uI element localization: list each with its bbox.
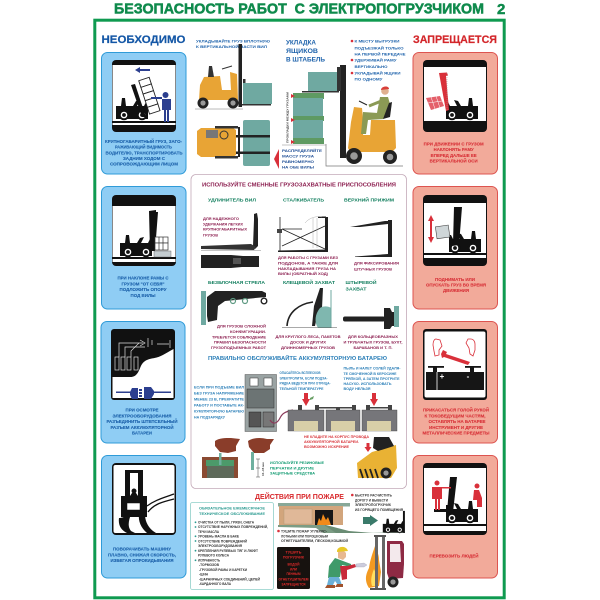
text [108, 546, 176, 563]
fire: warning box: ПЕННЫМ [286, 572, 301, 576]
attachment: pusher: СТАЛКИВАТЕЛЬ [283, 198, 324, 202]
heading: required: НЕОБХОДИМО [102, 34, 186, 46]
panel: monthly maintenance: ТЕЧИ МАСЛА [198, 530, 220, 534]
battery: cleaning note: НАСУХО. ИСПОЛЬЗОВАТЬ [344, 382, 392, 386]
heading: battery: ПРАВИЛЬНО ОБСЛУЖИВАЙТЕ АККУМУЛЯТОРНУЮ БАТАРЕЮ [208, 354, 387, 362]
panel: monthly maintenance: -ГРУЗОВОЙ РАМЫ И КАРЕТКИ [199, 568, 248, 572]
attachment: pusher: НАКЛАДЫВАНИЯ ГРУЗА НА [278, 266, 336, 271]
list: stacking rules: ПОДЪЕЗЖАЙ ТОЛЬКО [354, 45, 404, 50]
fire: burning building [278, 503, 405, 533]
attachment: pincer grip: ДОСОК И ДРУГИХ [290, 340, 326, 344]
panel: prohibited 1 [413, 52, 498, 174]
text: ГРУЗОМ "ОТ СЕБЯ" [122, 282, 164, 286]
battery: wire warning: НЕ КЛАДИТЕ НА КОРПУС ПРОВОДА [304, 435, 369, 439]
text: ОПУСКАТЬ ГРУЗ ВО ВРЕМЯ [426, 282, 486, 288]
attachment: top clamp: ДЛЯ ФИКСИРОВАНИЯ [354, 260, 399, 266]
battery: cleaning note: ТЕ СМОЧЕННОЙ В КЕРОСИНЕ [344, 372, 397, 376]
battery: low voltage note: КУМУЛЯТОРНУЮ БАТАРЕЮ [194, 410, 244, 414]
panel: prohibited 3: - [467, 372, 470, 381]
text: ИНСТРУМЕНТ И ДРУГИЕ [429, 425, 483, 430]
text: МАССУ ГРУЗА [282, 154, 314, 158]
text: ВОДИТЕЛЮ, ТРАНСПОРТИРОВАТЬ [106, 150, 182, 155]
panel: monthly maintenance: ОБЯЗАТЕЛЬНОЕ ЕЖЕМЕСЯЧНОЕ [199, 506, 265, 510]
attachment: pincer grip: ДЛЯ КРУГЛОГО ЛЕСА, ПАКЕТОВ [276, 334, 341, 339]
text: ВПЕРЕД ДАЛЬШЕ ЕЕ [431, 153, 477, 158]
panel: required 3 [101, 322, 185, 443]
attachment: top clamp: ШТУЧНЫХ ГРУЗОВ [354, 266, 392, 271]
attachment: pin grip: И ТРУБЧАТЫХ ГРУЗОВ, БУХТ, [344, 340, 402, 344]
text: РАЖИВАЮЩИЙ ВИДИМОСТЬ [115, 145, 172, 150]
panel: prohibited 3 [413, 322, 498, 443]
text [424, 142, 484, 164]
text [282, 149, 323, 169]
attachment: boom: БЕЗБЛОЧНАЯ СТРЕЛА [208, 280, 266, 285]
panel: required 2 [102, 186, 186, 309]
panel: monthly maintenance: ОТСУТСТВИЕ НАРУЖНЫХ ПОВРЕЖДЕНИЙ, [198, 525, 268, 529]
text [426, 277, 486, 293]
text: ЗАДНИМ ХОДОМ С [123, 156, 165, 161]
panel: monthly maintenance: -ШАРНИРНЫХ СОЕДИНЕНИЙ, ЦЕПЕЙ [199, 577, 261, 581]
panel: monthly maintenance: ОЧИСТКА ОТ ПЫЛИ, ГРЯЗИ, СНЕГА [198, 520, 255, 524]
text [106, 408, 178, 436]
heading: stacking: УКЛАДКА [286, 40, 317, 46]
attachment: pin grip: ШТЫРЕВОЙ [346, 280, 376, 285]
attachment: pusher: ДЛЯ РАБОТЫ С ГРУЗАМИ БЕЗ [278, 255, 339, 260]
battery: hand with hydrometer: 10–15 мм [261, 462, 265, 476]
list: stacking rules: УКЛАДЫВАЙ ЯЩИКИ [354, 70, 401, 76]
attachment: pincer grip: КЛЕЩЕВОЙ ЗАХВАТ [283, 280, 335, 285]
fire: extinguish note: ТУШИТЕ ПОЖАР УГЛЕКИС- [281, 530, 327, 534]
text: РАЗЪЕМ АККУМУЛЯТОРНОЙ [110, 425, 174, 430]
attachment: pincer grip [276, 280, 341, 350]
panel: monthly maintenance [190, 502, 274, 590]
battery: gloves note: ПЕРЧАТКИ И ДРУГИЕ [270, 466, 315, 470]
text: ОСТАВЛЯТЬ НА БАТАРЕЕ [428, 419, 486, 424]
list: stacking rules: УДЕРЖИВАЙ РАМУ [354, 58, 397, 63]
attachment: boom: ГРУЗОПОДЪЕМНЫХ РАБОТ [211, 345, 267, 350]
battery: cleaning note: ТРЯПКОЙ, А ЗАТЕМ ПРОТРИТЕ [344, 377, 400, 381]
panel: monthly maintenance: РУЛЕВОГО КОЛЕСА [198, 554, 230, 558]
text: СОПРОВОЖДАЮЩИМ ЛИЦОМ [110, 162, 179, 167]
fire: extinguish note [277, 530, 349, 543]
attachment: boom: ТРЕБУЕТСЯ СОБЛЮДЕНИЕ [212, 334, 266, 340]
panel: prohibited 4 [413, 456, 498, 578]
fire: warning box: ОГНЕТУШИТЕЛЕМ [278, 578, 309, 582]
text: ПОДНИМАТЬ ИЛИ [435, 277, 475, 282]
text: МЕТАЛЛИЧЕСКИЕ ПРЕДМЕТЫ [422, 430, 490, 436]
text: К ТОКОВЕДУЩИМ ЧАСТЯМ, [424, 414, 486, 418]
fire: clear road note: ИЗ ГОРЯЩЕГО ПОМЕЩЕНИЯ [355, 508, 404, 512]
battery: gloves note: ЗАЩИТНЫЕ СРЕДСТВА [270, 472, 315, 476]
fire: warning box: ЗАПРЕЩАЕТСЯ [282, 582, 306, 586]
fire: warning box: ВОДОЙ [288, 562, 300, 566]
title: БЕЗОПАСНОСТЬ РАБОТ С ЭЛЕКТРОПОГРУЗЧИКОМ [114, 1, 484, 17]
list: stacking rules: К МЕСТУ ВЫГРУЗКИ [354, 39, 400, 44]
text: НАКЛОНЯТЬ РАМУ [434, 147, 474, 152]
fire: clear road note [351, 494, 404, 512]
panel: monthly maintenance: -КАРДАННОГО ВАЛА [199, 582, 232, 586]
text: ИЗБЕГАЯ ОПРОКИДЫВАНИЯ [110, 558, 174, 563]
text: НА ОБЕ ВИЛЫ [282, 165, 314, 169]
attachment: boom: КОНФИГУРАЦИИ. [230, 329, 266, 334]
text: ПРИКАСАТЬСЯ ГОЛОЙ РУКОЙ [423, 408, 489, 412]
text: ПОДЛОЖИТЬ ОПОРУ [120, 287, 167, 292]
heading: stacking: ЯЩИКОВ [286, 48, 319, 55]
text [422, 408, 490, 436]
battery: hand with hydrometer [202, 438, 274, 478]
battery: charging note: ЭЛЕКТРОЛИТА, ЕСЛИ ПОДЗА- [280, 376, 328, 380]
battery: cleaning note [344, 366, 401, 391]
forklift side view with instruction: УКЛАДЫВАЙТЕ ГРУЗ ВПЛОТНУЮ [196, 38, 270, 44]
attachment: pin grip: ЗАХВАТ [346, 286, 367, 292]
panel: required 1 [102, 52, 186, 174]
text: РАЗЪЕДИНИТЬ ШТЕПСЕЛЬНЫЙ [106, 419, 178, 424]
fire: warning box: ИЛИ [290, 568, 298, 572]
text: БАТАРЕИ [132, 430, 152, 436]
battery: low voltage note: БЕЗ ГРУЗА НАПРЯЖЕНИЕ [194, 392, 244, 396]
battery: low voltage note: РАБОТУ И ПОСТАВЬТЕ АК- [194, 404, 245, 408]
frame border [95, 20, 504, 598]
panel: prohibited 3: + [440, 372, 445, 381]
fire: clear road note: БЫСТРО РАСЧИСТИТЬ [355, 494, 393, 498]
text: КРУПНОГАБАРИТНЫЙ ГРУЗ, ЗАГО- [105, 139, 183, 144]
battery: charger cabinet [245, 374, 293, 432]
text: ПРИ ОСМОТРЕ [126, 408, 159, 412]
battery: charging note: РЯДКА ВЕДЕТСЯ ПРИ ОТРИЦА- [280, 382, 331, 386]
text [118, 276, 168, 298]
text: ПОД ВИЛЫ [130, 293, 156, 298]
attachment: boom: ПРАВИЛ БЕЗОПАСНОСТИ [214, 340, 266, 345]
text: ПЕРЕВОЗИТЬ ЛЮДЕЙ [430, 554, 478, 558]
battery: wire warning [304, 435, 369, 449]
text: ВЕРТИКАЛЬНОЙ ОСИ [430, 158, 478, 164]
heading: fire actions: ДЕЙСТВИЯ ПРИ ПОЖАРЕ [255, 492, 344, 501]
attachment: pin grip: ДЛЯ КОЛЬЦЕОБРАЗНЫХ [348, 334, 398, 339]
forklift stacking boxes [282, 65, 403, 169]
attachment: boom: ДЛЯ ГРУЗОВ СЛОЖНОЙ [217, 324, 266, 328]
attachment: fork extender: ДЛЯ НАДЕЖНОГО [203, 216, 239, 221]
text: ПОВОРАЧИВАТЬ МАШИНУ [113, 546, 171, 552]
page number: 2 [497, 1, 505, 18]
panel: required 4 [102, 456, 186, 578]
fire: clear road note: ЭЛЕКТРОПОГРУЗЧИК [355, 503, 392, 507]
attachment: top clamp [344, 198, 399, 271]
panel: prohibited 2 [413, 186, 498, 309]
panel: monthly maintenance: УРОВЕНЬ МАСЛА В БАКЕ [198, 534, 240, 538]
panel: monthly maintenance: -ТОРМОЗОВ [199, 563, 220, 567]
panel: attachments and battery [191, 174, 406, 488]
battery: gloves note: ИСПОЛЬЗУЙТЕ РЕЗИНОВЫЕ [270, 461, 325, 465]
forklift stacking boxes: ПРОКЛАДКИ МЕЖДУ ГРУЗАМИ [286, 92, 290, 143]
forklift side view with instruction: К ВЕРТИКАЛЬНОЙ ЧАСТИ ВИЛ [196, 44, 267, 49]
attachment: pusher: ВИЛЫ (ОБРАТНЫЙ ХОД) [278, 271, 329, 276]
text: РАСПРЕДЕЛЯЙТЕ [282, 149, 323, 153]
text: ПЛАВНО, СНИЖАЯ СКОРОСТЬ, [108, 552, 176, 558]
battery: low voltage note: НА ПОДЗАРЯДКУ [194, 416, 226, 420]
list: stacking rules: ВЕРТИКАЛЬНО [354, 64, 388, 69]
attachment: fork extender [201, 198, 261, 268]
battery: charging note: ОПАСАЙТЕСЬ ВСПЛЕСКОВ [280, 371, 321, 375]
battery: low voltage note: ЕСЛИ ПРИ ПОДЪЕМЕ ВИЛ [194, 386, 244, 390]
list: stacking rules: ПО ОДНОМУ [354, 77, 383, 82]
heading: attachments: ИСПОЛЬЗУЙТЕ СМЕННЫЕ ГРУЗОЗАХВАТНЫЕ ПРИСПОСОБЛЕНИЯ [202, 180, 396, 188]
text: РАВНОМЕРНО [282, 160, 314, 164]
forklift top view [197, 120, 279, 169]
battery: cells [288, 393, 397, 431]
battery: cleaning note: ПЫЛЬ И НАЛЕТ СОЛЕЙ УДАЛЯ- [344, 366, 401, 370]
text: ЭЛЕКТРООБОРУДОВАНИЯ [112, 414, 172, 418]
panel: monthly maintenance: ТЕХНИЧЕСКОЕ ОБСЛУЖИВАНИЕ [199, 512, 265, 516]
panel: monthly maintenance: КРЕПЛЕНИЯ РУЛЕВЫХ ТЯГ И ЛЮФТ [198, 549, 258, 553]
heading: prohibited: ЗАПРЕЩАЕТСЯ [413, 34, 497, 46]
fire: clear road note: ДОРОГУ И ВЫВЕСТИ [355, 498, 389, 502]
fire: warning box: ПОГРУЗЧИК [283, 556, 305, 560]
battery: wire warning: АККУМУЛЯТОРНОЙ БАТАРЕИ. [304, 440, 359, 444]
attachment: boom [201, 280, 267, 350]
battery: cleaning note: ВОДУ НЕЛЬЗЯ [344, 387, 371, 391]
battery: charging note: ТЕЛЬНОЙ ТЕМПЕРАТУРЕ [280, 387, 324, 391]
attachment: pusher [277, 198, 339, 276]
fire: extinguish note: ОГНЕТУШИТЕЛЕМ, ПЕСКОМ,КОШМОЙ [281, 539, 349, 543]
heading: stacking: В ШТАБЕЛЬ [286, 56, 326, 64]
attachment: fork extender: УДЛИНИТЕЛЬ ВИЛ [208, 198, 256, 202]
heading: stacking [286, 40, 326, 64]
attachment: pusher: ПОДДОНОВ, А ТАКЖЕ ДЛЯ [278, 260, 338, 266]
battery: gloves note [270, 461, 325, 476]
text [105, 139, 183, 167]
battery: yellow forklift [357, 437, 397, 478]
attachment: pincer grip: ДЛИННОМЕРНЫХ ГРУЗОВ [281, 345, 335, 350]
battery: low voltage note: МЕНЕЕ 23 В, ПРЕКРАТИТЕ [194, 398, 244, 402]
attachment: pin grip: БАРАБАНОВ И Т. П. [354, 345, 392, 350]
fire: burning forklift [366, 535, 404, 590]
text: ПРИ НАКЛОНЕ РАМЫ С [118, 276, 168, 280]
fire: warning box: ТУШИТЬ [286, 550, 302, 554]
panel: monthly maintenance: ОТСУТСТВИЕ ПОВРЕЖДЕНИЙ [198, 539, 248, 543]
battery: low voltage note [194, 386, 245, 420]
panel: monthly maintenance: ЭЛЕКТРООБОРУДОВАНИЯ [198, 544, 243, 548]
panel: monthly maintenance: -ШИН [199, 572, 209, 576]
text: ПРИ ДВИЖЕНИИ С ГРУЗОМ [424, 142, 484, 146]
fire: firefighter [325, 547, 367, 588]
fire: extinguish note: ЛОТНЫМИ ИЛИ ПОРОШКОВЫМ [281, 534, 328, 538]
panel: monthly maintenance: ИСПРАВНОСТЬ [198, 558, 221, 562]
attachment: fork extender: ГРУЗОВ [203, 232, 218, 238]
battery: charging note [280, 371, 331, 391]
attachment: top clamp: ВЕРХНИЙ ПРИЖИМ [344, 198, 394, 202]
attachment: fork extender: КРУПНОГАБАРИТНЫХ [203, 227, 247, 232]
battery: wire warning: ВОЗМОЖНО ИСКРЕНИЕ [304, 445, 349, 449]
attachment: pin grip [343, 280, 402, 350]
text: ДВИЖЕНИЯ [443, 288, 469, 293]
fire: warning box [277, 547, 310, 589]
list: stacking rules: НА ПЕРВОЙ ПЕРЕДАЧЕ [354, 52, 406, 56]
attachment: fork extender: УДЕРЖАНИЯ ЛЕГКИХ [203, 222, 243, 226]
list: stacking rules [351, 39, 406, 82]
forklift side view with instruction [195, 38, 272, 109]
